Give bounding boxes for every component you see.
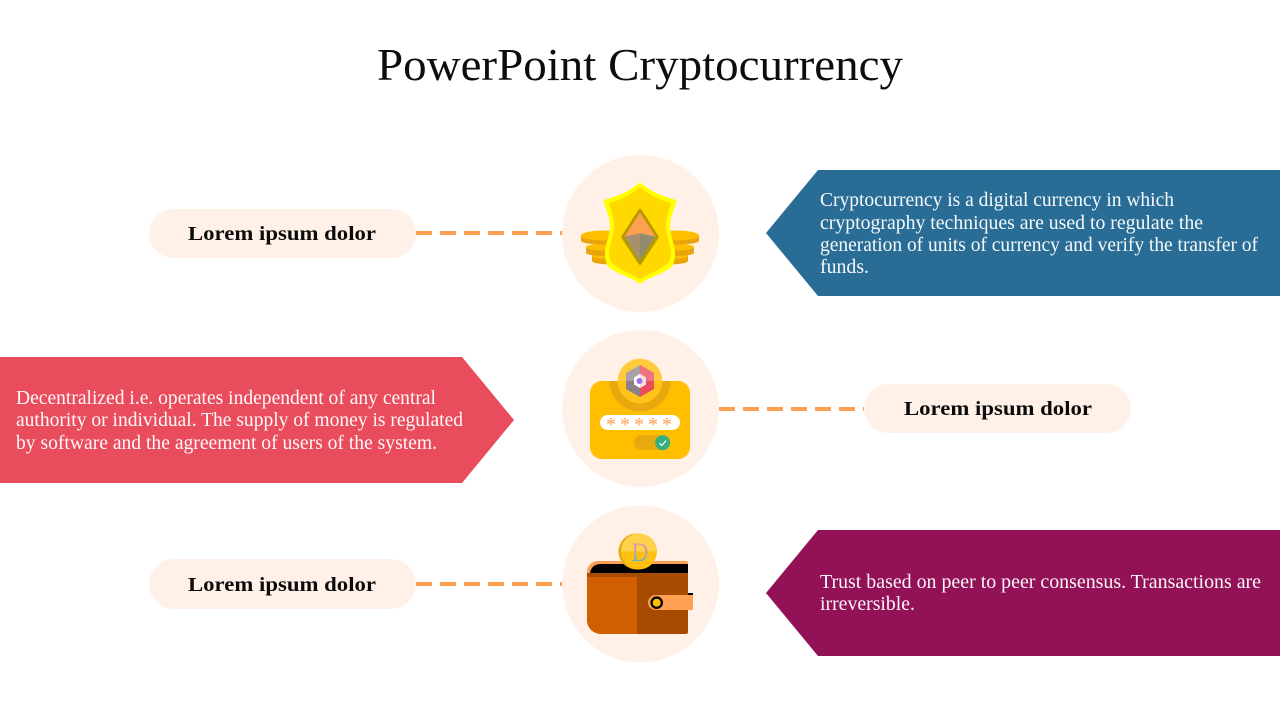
label pill: middle right xyxy=(864,384,1131,433)
callout: red decentralized: Decentralized i.e. operates independent of any central xyxy=(16,387,436,409)
label pill: top left xyxy=(149,209,416,258)
callout: blue definition: funds. xyxy=(820,256,869,278)
label pill: bottom left: Lorem ipsum dolor xyxy=(188,574,376,596)
callout: blue definition xyxy=(766,170,1280,296)
connector: top row xyxy=(416,231,562,235)
toggle xyxy=(634,435,670,450)
shield xyxy=(603,182,677,284)
coins right xyxy=(648,230,699,264)
clasp xyxy=(688,593,693,596)
label pill: bottom left xyxy=(149,559,416,609)
icon: leather wallet with coin: D xyxy=(632,538,648,567)
callout: purple trust: irreversible. xyxy=(820,593,915,615)
callout: red decentralized xyxy=(0,357,514,483)
callout: purple trust: Trust based on peer to peer consensus. Transactions are xyxy=(820,571,1261,593)
connector: middle row xyxy=(719,407,864,411)
callout: red decentralized: authority or individual. The supply of money is regulated xyxy=(16,409,463,431)
callout: blue definition: generation of units of currency and verify the transfer of xyxy=(820,234,1258,256)
wallet back xyxy=(587,561,688,575)
callout: blue definition: Cryptocurrency is a digital currency in which xyxy=(820,189,1174,211)
icon: password wallet card: ***** xyxy=(606,414,672,436)
coins left xyxy=(581,230,632,264)
connector: bottom row xyxy=(416,582,562,586)
password field xyxy=(600,415,680,430)
callout: purple trust xyxy=(766,530,1280,656)
diamond xyxy=(623,210,657,263)
icon: leather wallet with coin xyxy=(562,506,719,662)
callout: red decentralized: by software and the agreement of users of the system. xyxy=(16,432,437,454)
icon: shield with coins xyxy=(562,155,719,312)
card xyxy=(590,381,690,459)
coin xyxy=(610,381,670,411)
label pill: top left: Lorem ipsum dolor xyxy=(188,223,376,245)
label pill: middle right: Lorem ipsum dolor xyxy=(904,398,1092,420)
callout: blue definition: cryptography techniques are used to regulate the xyxy=(820,212,1203,234)
wallet body xyxy=(587,573,688,634)
hexagon xyxy=(640,365,654,397)
coin xyxy=(618,534,654,570)
title: PowerPoint Cryptocurrency xyxy=(377,39,903,90)
icon: password wallet card xyxy=(562,330,719,487)
